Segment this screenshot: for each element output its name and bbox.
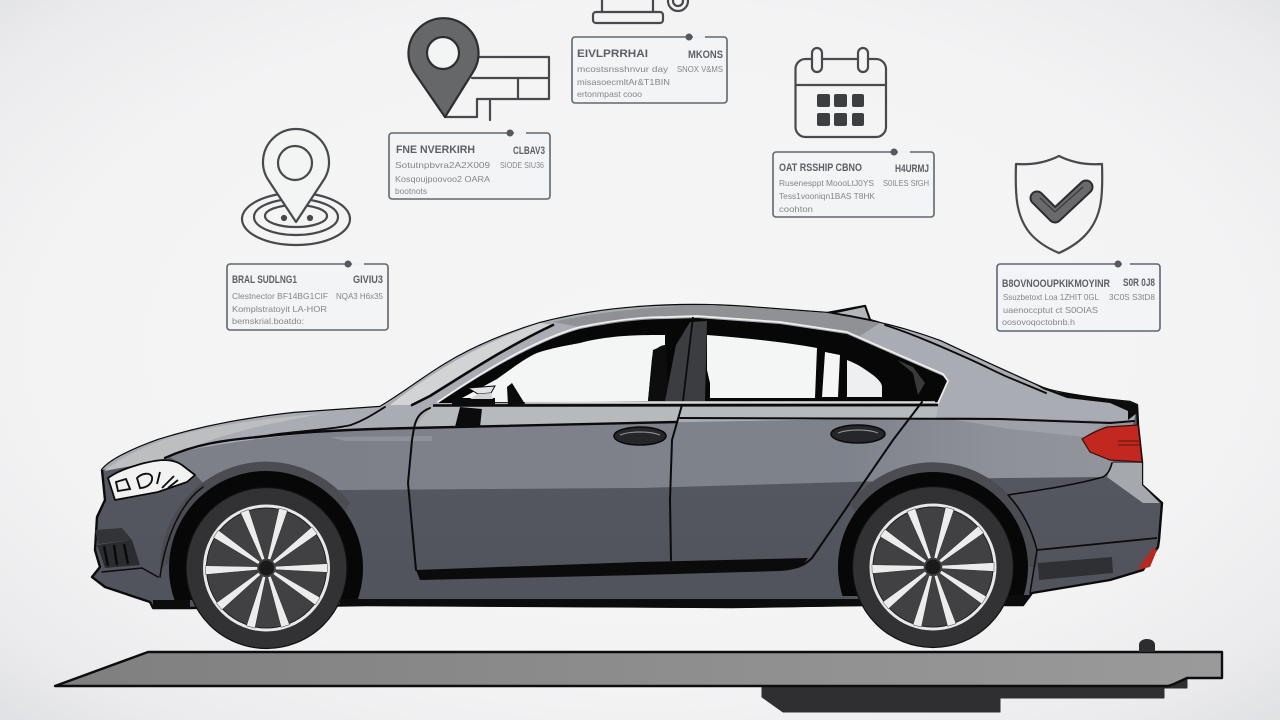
rear quarter highlight (950, 419, 1105, 437)
card: location details (227, 260, 388, 330)
side mirror (452, 383, 525, 406)
car body silhouette (92, 305, 1162, 608)
tail light (1082, 425, 1142, 462)
card: location details: bemskrial.boatdo: (232, 316, 304, 326)
car (92, 305, 1162, 665)
rear door handle (831, 425, 885, 443)
card: route details (389, 130, 550, 199)
front wheel arch (160, 462, 363, 600)
rear spoiler (1033, 383, 1137, 420)
card: schedule details: Tess1vooniqn1BAS T8HK (779, 191, 875, 201)
roof fin (832, 306, 870, 320)
card title: OAT RSSHIP CBNO (779, 162, 862, 174)
card: schedule details: H4URMJ (895, 163, 929, 175)
rear wheel arch (838, 462, 1038, 596)
door pillar (665, 321, 707, 401)
icon: filled pin with map (408, 18, 549, 120)
front window (462, 335, 665, 402)
rear bumper panel (1038, 557, 1113, 580)
front bumper fog lamp (95, 528, 158, 577)
card: route details: Sotutnpbvra2A2X009 (395, 160, 490, 170)
a-pillar base (455, 407, 482, 427)
arch trim lines (160, 487, 1037, 593)
card: device details: SNOX V&MS (677, 64, 723, 74)
windshield light strip (390, 323, 553, 405)
rear reflector (1137, 548, 1157, 570)
hood highlight (104, 414, 320, 471)
upper body panel (167, 417, 1134, 490)
card: protection details: oosovoqoctobnb.h (1002, 317, 1075, 327)
rear quarter window (847, 360, 882, 397)
window frame (438, 318, 947, 403)
roof, hood and deck panel (102, 305, 1137, 470)
card: protection details (997, 260, 1160, 331)
card: protection details: S0R 0J8 (1123, 277, 1155, 289)
card: route details: SIODE SIU36 (500, 160, 544, 170)
card: protection details: uaenoccptut ct S0OIAS (1003, 305, 1098, 315)
tail corner highlight (1107, 463, 1160, 503)
card: location details: NQA3 H6x35 (336, 291, 383, 301)
roof strip (553, 305, 880, 336)
icon: device on stand (593, 0, 688, 23)
card: route details: CLBAV3 (513, 145, 545, 157)
card: route details: bootnots (395, 186, 427, 196)
card: schedule details: S0ILES SfGH (883, 178, 929, 188)
belt strip (414, 407, 938, 428)
card: device details (572, 34, 727, 103)
fender highlight (330, 436, 432, 441)
lower rear dark strip line (1008, 463, 1112, 495)
door lines (408, 408, 430, 570)
front seat (648, 345, 668, 401)
card: device details: MKONS (688, 49, 723, 61)
card: schedule details: coohton (779, 204, 813, 214)
rear pillar detail (897, 360, 925, 395)
card: location details: Clestnector BF14BG1CIF (232, 291, 328, 301)
card: route details: Kosqoujpoovoo2 OARA (395, 174, 490, 184)
window chrome line (438, 316, 948, 403)
platform underside (762, 676, 1187, 712)
rear wheel (852, 486, 1014, 648)
card: device details: mcostsnsshnvur day (577, 64, 669, 74)
card: protection details: 3C0S S3tD8 (1109, 292, 1155, 302)
card title: FNE NVERKIRH (396, 144, 475, 156)
icon: calendar (796, 48, 886, 137)
lower sill strip (416, 558, 808, 580)
front wheel (186, 488, 347, 648)
card title: BRAL SUDLNG1 (232, 274, 297, 286)
rear bumper line (1037, 538, 1157, 550)
sill shadow (153, 595, 1030, 608)
rear door window (707, 335, 817, 398)
card title: EIVLPRRHAI (577, 48, 648, 60)
card: schedule details (773, 148, 934, 217)
rear roof edge line (885, 325, 1046, 393)
icon: shield with check (1016, 156, 1102, 253)
card: device details: ertonmpast cooo (577, 89, 642, 99)
shoulder and hood lines (165, 422, 677, 458)
rear small window (822, 352, 840, 397)
card: device details: misasoecmltAr&T1BIN (577, 77, 670, 87)
card: location details: Komplstratoyit LA-HOR (232, 304, 327, 314)
platform (55, 639, 1222, 712)
front door handle (614, 427, 666, 445)
card: protection details: Ssuzbetoxt Loa 1ZHIT 0GL (1003, 292, 1099, 302)
platform knob (1139, 639, 1155, 652)
card: schedule details: Rusenesppt MoooLtJ0YS (779, 178, 874, 188)
card title: B8OVNOOUPKIKMOYINR (1002, 278, 1110, 290)
icon: location pin with rings (242, 129, 350, 245)
card: location details: GIVIU3 (353, 274, 383, 286)
headlight (108, 460, 195, 500)
